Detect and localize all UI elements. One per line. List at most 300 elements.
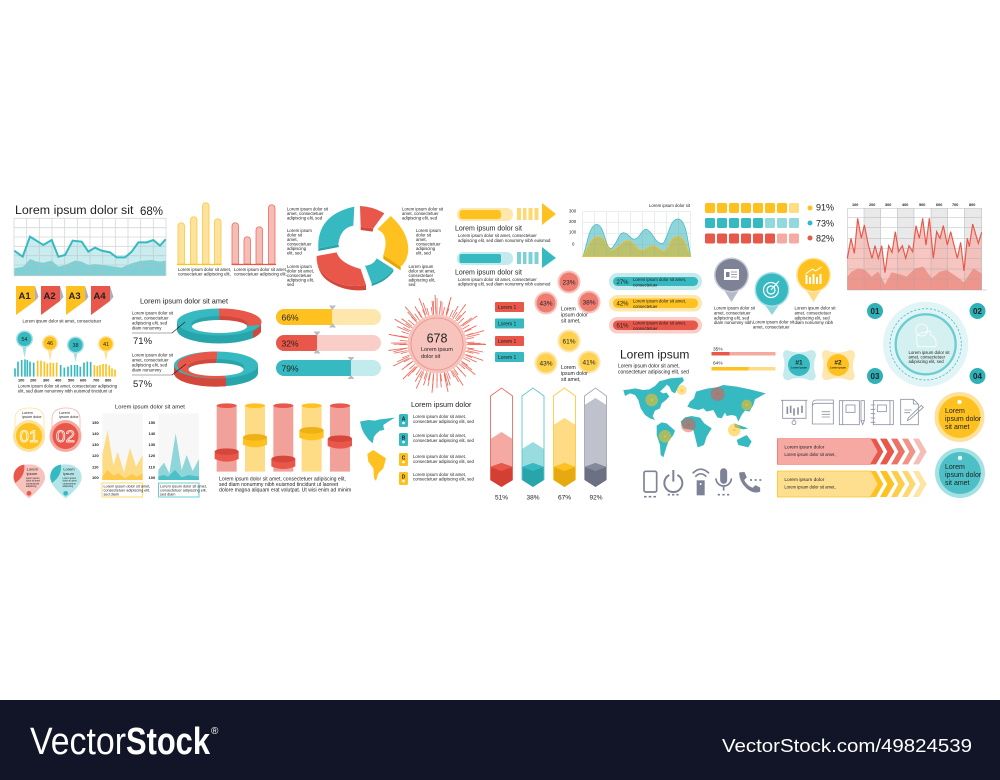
pin captions: adipiscing elit, sed — [714, 316, 750, 320]
legend C — [399, 453, 475, 466]
panel: teal progress arrow: Lorem ipsum dolor sit — [455, 270, 522, 276]
circle 43% red: 43% — [539, 300, 553, 308]
map: south america — [367, 450, 386, 481]
pill 27%: 27% — [616, 280, 629, 286]
axis labels: 130 — [148, 442, 156, 447]
pin captions: Lorem ipsum dolor sit — [794, 306, 836, 310]
circle captions — [561, 306, 588, 383]
axis labels: 120 — [92, 453, 99, 458]
pin: chart — [796, 258, 831, 302]
row 91% — [705, 203, 812, 213]
medallion 01: Lorem — [22, 411, 33, 415]
centre text: Lorem ipsum — [421, 347, 453, 353]
circle 61%: 61% — [562, 338, 576, 346]
panel: red line chart: 400 — [902, 203, 908, 207]
panel: map progress bars — [712, 346, 776, 370]
pin captions: amet, consectetuer — [794, 310, 832, 316]
donut labels: adipiscing elit, sed — [287, 216, 323, 220]
donut labels: sed — [287, 282, 295, 287]
subheading: world map: Lorem ipsum dolor sit amet, — [618, 364, 680, 370]
footer band — [0, 700, 1000, 780]
panel: Lorem 1 labels: Lorem 1 — [498, 355, 517, 361]
drop pin teal — [50, 464, 82, 498]
panel: yellow chevron arrow: Lorem ipsum dolor sit amet, — [784, 485, 836, 490]
donut labels: amet, — [287, 237, 298, 242]
medallion 01: ipsum dolor — [22, 415, 42, 419]
cylinder 3 — [271, 403, 295, 472]
drop pin teal: Lorem — [63, 466, 75, 471]
donut labels: sed — [408, 282, 416, 287]
footer image id: VectorStock.com/49824539 — [722, 736, 972, 756]
axis labels: 140 — [148, 431, 156, 436]
pin: id card — [714, 258, 749, 302]
donut labels: adipiscing — [287, 246, 307, 251]
panel: Lorem 1 labels: Lorem 1 — [498, 339, 517, 345]
panel: red line chart — [847, 203, 987, 290]
bar chart axis labels: 600 — [80, 378, 86, 382]
caption box teal: consectetuer adipiscing elit, — [160, 488, 207, 492]
chart: teal area — [158, 413, 199, 480]
footer logo: Vector — [30, 721, 126, 763]
panel: yellow progress arrow — [455, 203, 556, 243]
ring 57% — [132, 352, 258, 390]
axis labels: 130 — [92, 442, 99, 447]
medallion 02: ipsum dolor — [59, 415, 79, 419]
bar chart axis labels: 500 — [68, 378, 74, 382]
panel: map progress bars: 35% — [713, 346, 723, 352]
medallion 02: 02 — [56, 427, 75, 446]
caption box teal: Lorem ipsum dolor sit amet, — [160, 484, 207, 488]
slider 32%: 32% — [282, 338, 299, 348]
donut labels: adipiscing elit, — [287, 278, 314, 282]
map: north america — [360, 418, 395, 443]
ring 71%: adipiscing elit, sed — [132, 320, 168, 326]
ring 71%: diam nonummy — [132, 326, 162, 330]
ring 57%: amet, consectetuer — [132, 358, 169, 362]
cylinder 5 — [328, 403, 352, 472]
chart: red bars: Lorem ipsum dolor sit amet, — [234, 267, 287, 272]
flags caption: Lorem ipsum dolor sit amet, consectetuer — [22, 318, 102, 324]
pill 61%: consectetuer — [633, 326, 658, 331]
column 67%: 67% — [558, 494, 571, 502]
panel: red line chart: 600 — [936, 203, 942, 207]
column 38%: 38% — [526, 494, 540, 502]
legend D — [399, 472, 475, 485]
panel: yellow tag circle — [934, 392, 984, 442]
cylinder 4 — [299, 403, 324, 472]
badge 02: 02 — [973, 307, 982, 316]
icon: book — [812, 400, 833, 424]
bar chart axis labels — [18, 378, 111, 382]
legend D: consectetuer adipiscing elit, sed — [413, 476, 475, 482]
panel: location pins — [714, 258, 836, 330]
row 73% — [705, 218, 812, 228]
bar chart axis labels: 400 — [55, 378, 61, 382]
badge #1: #1 — [795, 360, 803, 366]
legend D: Lorem ipsum dolor sit amet, — [413, 472, 466, 477]
pill 42%: consectetuer — [633, 304, 658, 309]
donut labels: adipiscing elit, — [408, 278, 436, 282]
caption box yellow: Lorem ipsum dolor sit amet, — [104, 484, 150, 488]
footer logo: ® — [211, 726, 219, 737]
panel: pill labels — [609, 273, 702, 334]
panel: yellow tag circle: sit amet — [945, 424, 970, 431]
donut chart — [317, 206, 408, 290]
badge #2 — [822, 350, 855, 380]
slider 79%: 79% — [282, 364, 299, 374]
percent labels: 73% — [816, 218, 834, 228]
circle text: adipiscing elit, sed — [908, 359, 944, 364]
panel: rank badges — [783, 350, 855, 380]
badge 03: 03 — [871, 372, 880, 381]
axis labels: 110 — [148, 464, 156, 470]
caption box teal: sed diam — [160, 492, 175, 496]
footer logo: Stock — [126, 721, 211, 763]
legend B: Lorem ipsum dolor sit amet, — [413, 433, 466, 438]
pill 61%: 61% — [616, 324, 629, 330]
icon: power — [664, 470, 682, 495]
pin captions: adipiscing elit, sed — [794, 316, 830, 320]
cylinder caption: Lorem ipsum dolor sit amet, consectetuer adipiscing elit, — [219, 476, 346, 482]
donut labels: dolor sit — [416, 232, 432, 238]
icon: notebook and pencil — [839, 401, 864, 425]
ring 57%: Lorem ipsum dolor sit — [132, 352, 174, 358]
donut labels: adipiscing — [416, 246, 436, 251]
pill 42%: Lorem ipsum dolor sit amet, — [633, 298, 686, 304]
heading: line chart: Lorem ipsum dolor sit — [15, 203, 134, 217]
panel: Lorem 1 labels: Lorem 1 — [498, 322, 517, 328]
panel: yellow tag circle: Lorem — [945, 408, 965, 415]
panel: teal tag circle: ipsum dolor — [945, 472, 982, 479]
heading: legend: Lorem ipsum dolor — [411, 400, 472, 409]
donut labels: elit, sed — [416, 250, 431, 256]
panel: red line chart: 100 — [852, 203, 858, 207]
panel: top area chart: 300 — [569, 208, 577, 214]
panel: top area chart: 200 — [569, 219, 577, 224]
centre text: 678 — [427, 332, 447, 346]
percent labels: 91% — [816, 202, 834, 212]
circle captions: ipsum dolor — [561, 371, 588, 377]
panel: exploded donut — [287, 206, 444, 290]
panel: 678 sunburst — [391, 298, 485, 388]
bar chart axis labels: 800 — [105, 378, 111, 382]
ring 57%: 57% — [133, 379, 153, 390]
ring 71%: 71% — [133, 336, 153, 347]
pin 38: 38 — [72, 343, 79, 349]
donut labels: Lorem ipsum — [408, 264, 434, 269]
centre text — [421, 332, 453, 360]
badge 04: 04 — [973, 372, 982, 381]
ring 57%: adipiscing elit, sed — [132, 362, 168, 368]
centre circle — [408, 314, 466, 374]
medallion 02 — [50, 408, 82, 452]
flag A4: A4 — [94, 291, 106, 302]
legend C: Lorem ipsum dolor sit amet, — [413, 454, 466, 459]
pin 46: 46 — [47, 341, 53, 347]
circle 43% yellow: 43% — [539, 360, 553, 368]
donut labels: Lorem ipsum dolor sit — [287, 206, 329, 212]
panel: red line chart: 300 — [885, 203, 891, 207]
panel: regional legend — [360, 400, 475, 485]
pin: target — [754, 272, 790, 315]
ring 71%: amet, consectetuer — [132, 316, 169, 320]
pin captions: Lorem ipsum dolor sit — [753, 320, 795, 324]
heading: rings: Lorem ipsum dolor sit amet — [140, 296, 228, 306]
column 92%: 92% — [589, 494, 603, 502]
caption box teal — [158, 483, 207, 497]
chart: red bars: consectetuer adipiscing elit, — [234, 272, 287, 276]
panel: teal tag circle: Lorem — [945, 464, 965, 471]
legend A: Lorem ipsum dolor sit amet, — [413, 414, 466, 419]
cylinder 1 — [215, 403, 239, 472]
panel: red line chart: 700 — [952, 203, 958, 207]
burst rays — [391, 298, 485, 388]
chart: yellow bars — [177, 203, 231, 276]
legend A: consectetuer adipiscing elit, sed — [413, 419, 475, 424]
panel: world map — [618, 348, 766, 457]
bar chart caption: elit, sed diam nonummy nibh euismod tincidunt ut — [18, 388, 113, 394]
pill 42% — [609, 295, 702, 312]
panel: numbered circle 01-04 — [867, 302, 986, 387]
drop pin teal: dolor sit amet — [63, 480, 77, 483]
icon: presentation board — [781, 400, 807, 425]
donut labels: amet, consectetuer — [402, 211, 439, 216]
ring 71% — [132, 308, 262, 347]
circle 38%: 38% — [582, 300, 596, 306]
ring 57%: diam nonummy — [132, 368, 162, 372]
axis labels: 100 — [148, 475, 156, 480]
flag A1: A1 — [18, 291, 31, 302]
caption box yellow: sed diam — [104, 492, 119, 496]
panel: hexagon columns — [490, 388, 606, 502]
bar chart axis labels: 200 — [30, 378, 36, 382]
bar chart caption: Lorem ipsum dolor sit amet, consectetuer adipiscing — [18, 384, 118, 388]
badge #2: Lorem ipsum — [830, 366, 847, 370]
donut labels — [287, 206, 444, 287]
badge #1 — [783, 350, 816, 380]
panel: yellow progress arrow: Lorem ipsum dolor sit amet, consectetuer — [458, 233, 537, 238]
centre text: dolor sit — [421, 354, 441, 360]
slider 66%: 66% — [282, 312, 299, 322]
donut labels: dolor sit amet, — [287, 268, 314, 274]
legend C: C — [402, 456, 406, 462]
drop pin red — [13, 464, 45, 498]
pill 27% — [609, 273, 702, 290]
panel: numbered medallions — [13, 408, 82, 498]
circle captions: Lorem — [561, 306, 576, 312]
legend B: consectetuer adipiscing elit, sed — [413, 438, 475, 443]
chart: yellow area — [102, 413, 143, 480]
drop pin teal: Lorem ipsum — [63, 477, 76, 480]
panel: A1-A4 flags — [16, 286, 114, 324]
donut labels: Lorem ipsum — [287, 264, 312, 269]
panel: red line chart: 500 — [919, 203, 925, 207]
pill 27%: consectetuer — [633, 282, 658, 288]
panel: cylinder sliders — [215, 403, 352, 494]
drop pin red: consectetuer — [26, 482, 40, 485]
axis labels: 100 — [92, 475, 99, 480]
pin captions: amet, consectetuer — [753, 324, 790, 330]
panel: top area chart: 100 — [569, 230, 577, 234]
circle 41%: 41% — [582, 360, 596, 366]
drop pin red: Lorem ipsum — [26, 477, 40, 480]
panel: yellow chevron arrow — [777, 471, 927, 497]
drop pin teal: consectetuer — [63, 482, 76, 485]
donut labels: elit, sed — [287, 250, 302, 256]
chart: yellow bars: consectetuer adipiscing elit, — [178, 272, 231, 276]
legend A — [399, 414, 475, 427]
panel: yellow tag circle: ipsum dolor — [945, 416, 982, 423]
subheading: world map — [618, 364, 689, 376]
legend A: A — [402, 416, 406, 422]
icon: wifi remote — [693, 469, 709, 495]
legend C: consectetuer adipiscing elit, sed — [413, 459, 475, 464]
panel: red chevron arrow — [777, 439, 927, 464]
pin 54: 54 — [21, 337, 28, 343]
flag A3: A3 — [68, 291, 81, 302]
panel: line icons — [781, 399, 923, 425]
chart: red bars — [232, 205, 287, 276]
circle captions: Lorem — [561, 365, 576, 371]
cylinder caption — [219, 476, 351, 494]
pin captions: diam nonummy nibh — [714, 320, 753, 325]
value: 68%: 68% — [140, 206, 163, 218]
panel: Lorem 1 labels — [495, 302, 524, 362]
donut labels: Lorem ipsum — [287, 228, 312, 233]
pin 41: 41 — [103, 342, 109, 348]
percent labels — [816, 202, 834, 244]
icon: microphone — [716, 468, 731, 495]
drop pin red: dolor sit amet — [26, 480, 40, 483]
circle captions: sit amet, — [561, 377, 581, 383]
donut labels: dolor sit amet, — [408, 268, 436, 274]
cylinder caption: sed diam nonummy nibh euismod tincidunt ut laoreet — [219, 482, 339, 488]
panel: yellow chevron arrow: Lorem ipsum dolor — [784, 477, 825, 483]
pin captions: diam nonummy nibh — [794, 320, 834, 325]
badge #1: Lorem ipsum — [791, 366, 808, 370]
pill 61% — [609, 317, 702, 334]
pin captions: Lorem ipsum dolor sit — [714, 306, 756, 310]
pin captions — [714, 306, 836, 330]
axis labels: 120 — [148, 453, 156, 458]
panel: red chevron arrow: Lorem ipsum dolor sit amet, — [784, 452, 836, 457]
circle text: amet, consectetuer — [908, 354, 946, 360]
icon: document and pen — [901, 399, 923, 425]
bar chart — [15, 359, 115, 377]
panel: red line chart: 800 — [969, 203, 975, 207]
panel: square percentage rows — [705, 202, 834, 244]
drop pin teal: ipsum — [63, 471, 75, 476]
ring 71%: Lorem ipsum dolor sit — [132, 310, 174, 316]
column 51%: 51% — [495, 494, 508, 502]
panel: teal progress arrow — [455, 247, 556, 286]
pill 42%: 42% — [616, 302, 629, 308]
heading: world map: Lorem ipsum — [620, 348, 689, 362]
donut labels: consectetuer — [416, 242, 441, 246]
donut labels: amet, — [416, 237, 427, 242]
donut labels: consectetuer — [287, 273, 312, 278]
panel: device icons — [644, 468, 761, 497]
legend D: D — [402, 474, 406, 480]
bar chart axis labels: 300 — [43, 378, 49, 382]
cylinder 2 — [243, 403, 267, 472]
drop pin red: Lorem — [27, 466, 39, 471]
axis labels: 150 — [148, 420, 156, 425]
panel: percent sliders — [276, 306, 381, 379]
medallion 01: 01 — [20, 427, 38, 446]
donut labels: consectetuer — [287, 242, 312, 246]
panel: teal tag circle: sit amet — [945, 480, 970, 487]
heading: area charts: Lorem ipsum dolor sit amet — [115, 404, 185, 410]
circle captions: ipsum dolor — [561, 312, 588, 318]
axis labels: 150 — [92, 420, 99, 425]
legend B — [399, 433, 475, 446]
icon: telephone — [739, 472, 761, 492]
donut labels: Lorem ipsum — [416, 228, 441, 233]
axis labels — [92, 420, 156, 480]
drop pin teal: adipiscing — [63, 486, 74, 488]
pill 27%: Lorem ipsum dolor sit amet, — [633, 277, 686, 282]
pin captions: amet, consectetuer — [714, 310, 751, 316]
chart: teal line area — [14, 218, 166, 276]
panel: red chevron arrow: Lorem ipsum dolor — [784, 444, 825, 450]
caption box yellow — [102, 483, 150, 497]
bar chart axis labels: 700 — [93, 378, 99, 382]
donut labels: dolor sit — [287, 232, 303, 238]
panel: top area chart: 0 — [572, 242, 575, 246]
row 82% — [705, 234, 812, 244]
donut labels: adipiscing elit, sed — [402, 216, 438, 220]
circle text — [908, 350, 950, 364]
panel: percentage circles — [534, 270, 600, 383]
caption box yellow: consectetuer adipiscing elit, — [104, 488, 150, 492]
panel: teal progress arrow: Lorem ipsum dolor sit amet, consectetuer — [458, 277, 537, 282]
map — [623, 377, 766, 457]
drop pin red: adipiscing — [26, 486, 37, 488]
cylinder caption: dolore magna aliquam erat volutpat. Ut wisi enim ad minim — [219, 488, 351, 494]
donut labels: consectetuer — [408, 273, 434, 278]
percent labels: 82% — [816, 234, 834, 244]
medallion 02: Lorem — [59, 411, 70, 415]
donut labels: Lorem ipsum dolor sit — [402, 206, 444, 212]
axis labels: 140 — [92, 431, 99, 436]
panel: teal tag circle — [935, 448, 985, 498]
drop pin red: ipsum — [27, 471, 38, 476]
chart: yellow bars: Lorem ipsum dolor sit amet, — [178, 267, 231, 272]
panel: yellow progress arrow: Lorem ipsum dolor sit — [455, 226, 522, 232]
icon: phone — [644, 471, 657, 497]
circle text: Lorem ipsum dolor sit — [908, 350, 950, 355]
axis labels: 110 — [92, 464, 99, 470]
panel: line chart with title — [14, 203, 166, 276]
icon: spiral notebook — [871, 401, 893, 425]
panel: top area chart: Lorem ipsum dolor sit — [649, 203, 691, 208]
subheading: world map: consectetuer adipiscing elit, sed — [618, 370, 689, 376]
circle captions: sit amet, — [561, 318, 581, 324]
footer logo — [30, 721, 219, 763]
panel: red line chart: 200 — [869, 203, 875, 207]
badge #2: #2 — [834, 360, 842, 366]
panel: pins over bar chart — [15, 330, 118, 394]
panel: map progress bars: 64% — [713, 360, 723, 366]
pill 61%: Lorem ipsum dolor sit amet, — [633, 320, 686, 326]
circle 23%: 23% — [562, 280, 576, 286]
badge 01: 01 — [871, 307, 880, 316]
medallion 01 — [13, 408, 45, 452]
panel: Lorem 1 labels: Lorem 1 — [498, 305, 517, 311]
panel: top area chart — [569, 203, 691, 257]
legend B: B — [402, 436, 406, 442]
